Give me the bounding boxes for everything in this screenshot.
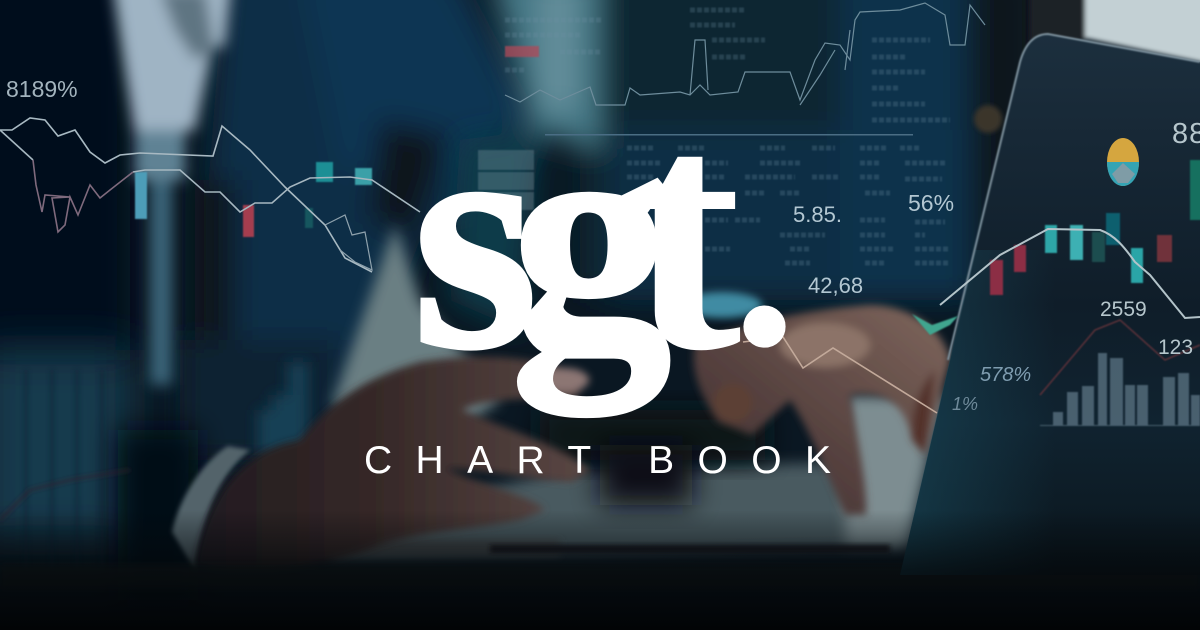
left charts [0,76,420,272]
dashboard numbers: 56% [908,190,954,216]
logo: sgt.: s [413,61,538,415]
laptop base [490,545,890,553]
divider line [545,134,913,136]
green chart accent [912,314,958,335]
top chart [505,3,985,105]
dashboard numbers: 42,68 [808,273,863,298]
centre dashboard panel [450,0,1035,350]
orange light spot [974,105,1002,133]
pink chart segment [33,160,133,232]
shirt front [332,225,500,460]
red tag [505,46,539,57]
blurred data rows [505,10,950,263]
logo: sgt.: . [732,113,797,401]
laptop numbers: 2559 [1100,298,1147,321]
laptop numbers: 123 [1158,336,1193,359]
shirt and tie [112,0,232,385]
percent label: 8189% [6,76,78,102]
candle markers [135,162,372,237]
lower descending segment [325,215,372,270]
dashboard numbers [793,190,954,298]
cuff [172,446,250,570]
line chart one [0,118,372,272]
laptop numbers: 1% [952,394,978,414]
candles [990,160,1200,295]
red trend line [1040,320,1200,395]
keyboard area [330,395,945,560]
subtitle: chart book: CHART BOOK [364,439,831,482]
left hand [195,357,590,572]
bottom shade [0,510,1200,630]
window [1030,0,1200,64]
laptop numbers: 578% [980,364,1031,386]
line chart two [0,130,420,212]
laptop line chart [940,229,1200,318]
blue glow behind logo [682,292,762,318]
logo: sgt.: g [511,61,671,420]
logo: sgt. [413,47,797,421]
laptop numbers [952,118,1200,414]
logo: sgt.: t [629,47,745,421]
suit [0,0,540,460]
small panel blocks [478,150,534,210]
right hand [694,305,950,515]
pie icon [1107,138,1139,186]
lower left bar chart [0,350,308,600]
laptop screen [900,34,1200,575]
dashboard numbers: 5.85. [793,202,842,227]
laptop [900,34,1200,575]
laptop screen teal side [900,250,1200,575]
laptop bar chart [1040,353,1200,426]
hand trend line [743,337,937,413]
dashboard details [478,3,985,413]
laptop edge [948,34,1200,360]
table edge [0,565,1200,589]
